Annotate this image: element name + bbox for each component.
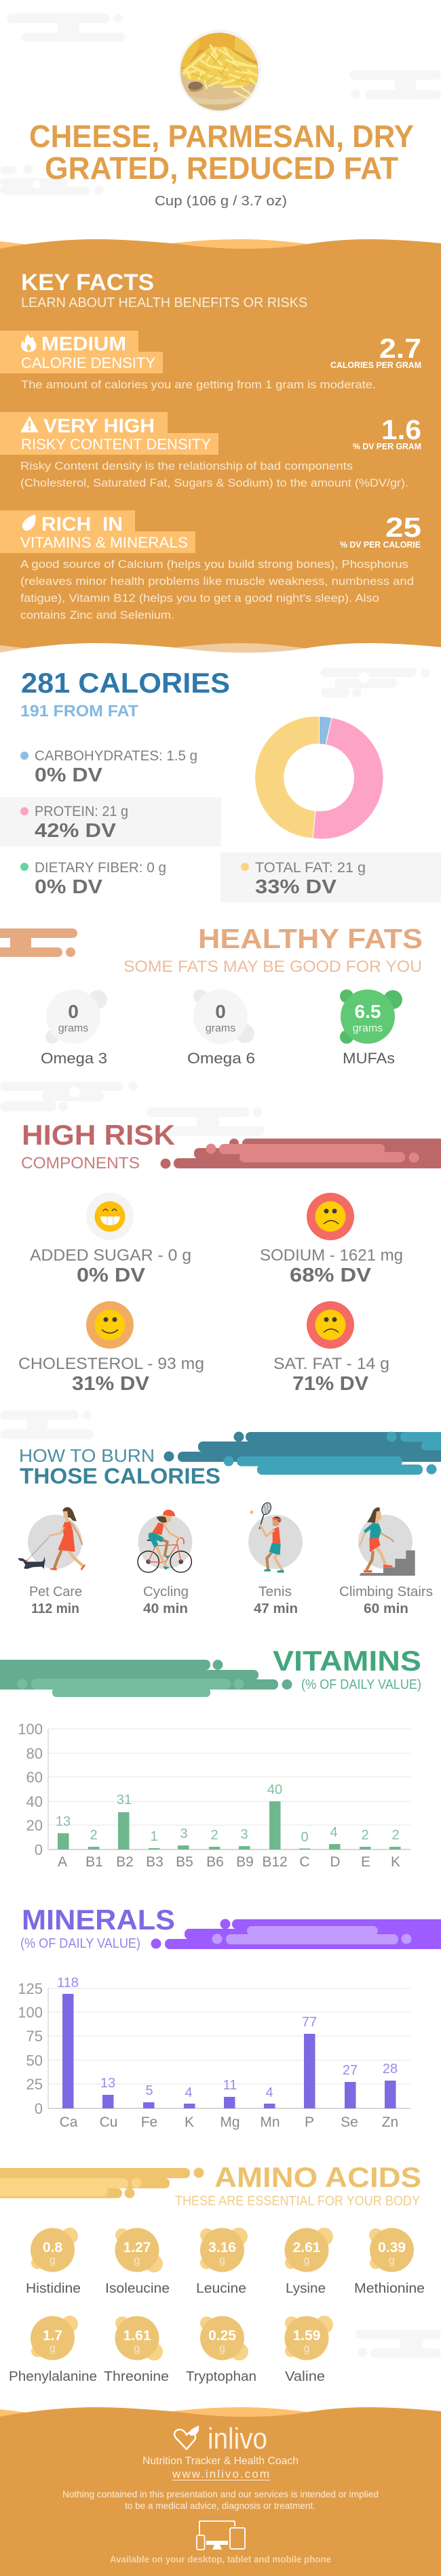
- heading: high risk: COMPONENTS: [21, 1154, 140, 1172]
- risk: cholesterol: 31% DV: [72, 1373, 150, 1395]
- chart: minerals bar chart: 75: [26, 2028, 43, 2045]
- chart: vitamins bar chart: A: [58, 1854, 67, 1870]
- icon: flame: [21, 334, 36, 352]
- disclaimer: Nothing contained in this presentation and our services is intended or implied: [62, 2489, 379, 2499]
- heading: key facts: [21, 270, 307, 310]
- amino acid: threonine: [104, 2316, 169, 2384]
- activity: climbing stairs: [339, 1507, 433, 1616]
- heading: amino acids: AMINO ACIDS: [214, 2161, 421, 2193]
- chart: minerals bar chart: 77: [302, 2015, 317, 2030]
- chart: minerals bar chart: 4: [265, 2085, 273, 2100]
- chart: calorie donut: [255, 716, 383, 839]
- chart: vitamins bar chart: [18, 1721, 410, 1870]
- decoration: healthy fats blob: [0, 928, 77, 957]
- disclaimer: [62, 2489, 379, 2511]
- heading: how to burn those calories: HOW TO BURN: [19, 1446, 155, 1466]
- chart: vitamins bar chart: 40: [267, 1782, 282, 1797]
- chart: minerals bar chart: 4: [185, 2085, 193, 2100]
- title: CHEESE, PARMESAN, DRY: [29, 119, 414, 154]
- risk: saturated fat: [273, 1301, 389, 1395]
- stat: MUFAs: [340, 989, 402, 1067]
- chart: minerals bar chart: 125: [18, 1980, 43, 1997]
- amino acid: methionine: g: [389, 2255, 395, 2266]
- activity: pet care: Pet Care: [29, 1585, 82, 1599]
- chart: minerals bar chart: Cu: [100, 2114, 117, 2130]
- legend: total fat: TOTAL FAT: 21 g: [255, 860, 366, 876]
- fact: risky content density: RISKY CONTENT DENSITY: [21, 436, 211, 453]
- fact: vitamins and minerals: % DV PER CALORIE: [340, 539, 421, 550]
- tagline: Nutrition Tracker & Health Coach: [142, 2455, 299, 2467]
- footer: [0, 2407, 441, 2576]
- fact: calorie density: The amount of calories you are getting from 1 gram is moderate.: [21, 378, 376, 391]
- heading: amino acids: [175, 2161, 421, 2209]
- chart: minerals bar chart: [18, 1976, 410, 2130]
- panel: key facts: [0, 239, 441, 664]
- chart: vitamins bar chart: 3: [180, 1826, 188, 1841]
- chart: minerals bar chart: Fe: [141, 2114, 157, 2130]
- fact: vitamins and minerals: fatigue), Vitamin B12 (helps you to get a good night's sleep). Also: [20, 592, 379, 605]
- serving size: Cup (106 g / 3.7 oz): [155, 194, 287, 209]
- heading: calories: 281 CALORIES: [21, 667, 230, 699]
- chart: minerals bar chart: Mn: [260, 2114, 280, 2130]
- amino acid: histidine: [26, 2228, 81, 2296]
- amino acid: threonine: g: [134, 2343, 140, 2354]
- heading: calories: [20, 667, 230, 720]
- stat: omega 6: grams: [206, 1023, 235, 1034]
- stat: omega 3: [41, 989, 107, 1067]
- activity: tennis: 47 min: [254, 1601, 298, 1616]
- amino acid: phenylalanine: [9, 2316, 97, 2384]
- activity: tennis: Tenis: [258, 1585, 292, 1599]
- chart: vitamins bar chart: 1: [150, 1829, 158, 1844]
- chart: vitamins bar chart: 0: [301, 1830, 309, 1845]
- legend: total fat: [220, 853, 441, 903]
- chart: vitamins bar chart: 2: [210, 1828, 218, 1843]
- heading: vitamins: VITAMINS: [273, 1645, 421, 1677]
- risk: added sugar: [30, 1193, 191, 1286]
- chart: vitamins bar chart: B1: [85, 1854, 103, 1870]
- heading: calories: 191 FROM FAT: [20, 702, 138, 720]
- activity: cycling: [138, 1510, 193, 1616]
- activity: cycling: Cycling: [143, 1585, 189, 1599]
- icon: grinning face: [95, 1201, 125, 1232]
- chart: minerals bar chart: K: [185, 2114, 194, 2130]
- amino acid: methionine: [354, 2228, 425, 2296]
- fact: vitamins and minerals: VITAMINS & MINERALS: [20, 534, 188, 551]
- food photo: grated cheese: [178, 30, 261, 114]
- activity: pet care: 112 min: [31, 1601, 79, 1616]
- risk: sodium: [260, 1193, 403, 1286]
- chart: vitamins bar chart: B9: [236, 1854, 254, 1870]
- amino acid: leucine: 3.16: [208, 2240, 236, 2255]
- icon: sad face: [315, 1201, 346, 1232]
- amino acid: histidine: 0.8: [43, 2240, 62, 2255]
- fact: vitamins and minerals: 25: [385, 512, 421, 543]
- chart: minerals bar chart: 118: [57, 1976, 79, 1990]
- chart: vitamins bar chart: 2: [391, 1828, 400, 1843]
- amino acid: methionine: 0.39: [378, 2240, 406, 2255]
- chart: minerals bar chart: Mg: [220, 2114, 240, 2130]
- legend: dietary fiber: [20, 860, 166, 898]
- risk: added sugar: ADDED SUGAR - 0 g: [30, 1246, 191, 1265]
- chart: vitamins bar chart: 80: [26, 1745, 43, 1762]
- stat: omega 3: 0: [68, 1001, 79, 1022]
- chart: vitamins bar chart: 0: [35, 1841, 43, 1858]
- chart: minerals bar chart: P: [305, 2114, 314, 2130]
- chart: minerals bar chart: 11: [223, 2078, 237, 2093]
- amino acid: isoleucine: g: [134, 2255, 140, 2266]
- heading: minerals: (% OF DAILY VALUE): [20, 1936, 140, 1951]
- chart: vitamins bar chart: B5: [176, 1854, 193, 1870]
- chart: vitamins bar chart: D: [330, 1854, 341, 1870]
- icon: devices: [197, 2521, 245, 2550]
- illustration: woman climbing stairs: [360, 1507, 415, 1576]
- illustration: woman walking dog: [18, 1507, 85, 1570]
- amino acid: isoleucine: [105, 2228, 170, 2296]
- title: [29, 119, 414, 186]
- stat: omega 6: Omega 6: [187, 1050, 255, 1067]
- decoration: burn calories blob: [164, 1431, 441, 1475]
- chart: vitamins bar chart: 2: [90, 1828, 98, 1843]
- amino acid: isoleucine: Isoleucine: [105, 2281, 170, 2296]
- risk: sodium: 68% DV: [290, 1265, 372, 1286]
- heading: minerals: MINERALS: [22, 1904, 175, 1936]
- chart: vitamins bar chart: 40: [26, 1793, 43, 1810]
- fact: vitamins and minerals: contains Zinc and Selenium.: [20, 609, 174, 621]
- fact: calorie density: [0, 331, 421, 391]
- amino acid: tryptophan: 0.25: [208, 2328, 236, 2344]
- amino acid: valine: [285, 2316, 333, 2384]
- chart: vitamins bar chart: 13: [56, 1814, 71, 1829]
- fact: vitamins and minerals: A good source of Calcium (helps you build strong bones), Phosphorus: [20, 558, 408, 571]
- heading: high risk: [21, 1119, 175, 1172]
- amino acid: methionine: Methionine: [354, 2281, 425, 2296]
- risk: cholesterol: CHOLESTEROL - 93 mg: [18, 1355, 204, 1373]
- amino acid: tryptophan: [186, 2316, 256, 2384]
- amino acid: leucine: Leucine: [196, 2281, 246, 2296]
- chart: minerals bar chart: Zn: [382, 2114, 398, 2130]
- chart: minerals bar chart: 25: [26, 2076, 43, 2093]
- stat: omega 6: 0: [215, 1001, 226, 1022]
- heading: healthy fats: SOME FATS MAY BE GOOD FOR YOU: [123, 958, 422, 976]
- disclaimer: to be a medical advice, diagnosis or treatment.: [125, 2501, 315, 2511]
- legend: dietary fiber: 0% DV: [35, 876, 103, 898]
- chart: vitamins bar chart: 4: [330, 1825, 338, 1840]
- legend: carbohydrates: 0% DV: [35, 764, 103, 786]
- amino acid: histidine: Histidine: [26, 2281, 81, 2296]
- amino acid: phenylalanine: 1.7: [43, 2328, 62, 2344]
- activity: climbing stairs: 60 min: [364, 1601, 408, 1616]
- icon: leaf: [22, 514, 35, 531]
- amino acid: lysine: Lysine: [286, 2281, 326, 2296]
- amino acid: lysine: [285, 2228, 333, 2296]
- chart: vitamins bar chart: E: [361, 1854, 370, 1870]
- legend: carbohydrates: CARBOHYDRATES: 1.5 g: [35, 748, 197, 764]
- fact: calorie density: CALORIE DENSITY: [21, 354, 155, 371]
- heading: how to burn those calories: [19, 1446, 220, 1488]
- fact: risky content density: 1.6: [381, 414, 421, 445]
- chart: minerals bar chart: 28: [383, 2062, 398, 2077]
- illustration: cyclist: [138, 1510, 191, 1572]
- chart: vitamins bar chart: B2: [116, 1854, 134, 1870]
- fact: risky content density: % DV PER GRAM: [353, 441, 421, 451]
- activity: tennis: [248, 1501, 303, 1616]
- legend: protein: [0, 797, 221, 846]
- amino acid: threonine: Threonine: [104, 2369, 169, 2384]
- risk: saturated fat: 71% DV: [292, 1373, 369, 1395]
- amino acid: histidine: g: [50, 2255, 56, 2266]
- heading: key facts: LEARN ABOUT HEALTH BENEFITS OR RISKS: [21, 295, 307, 310]
- risk: added sugar: 0% DV: [77, 1265, 146, 1286]
- decoration: amino acids blob: [0, 2167, 204, 2199]
- chart: vitamins bar chart: 60: [26, 1769, 43, 1786]
- fact: risky content density: (Cholesterol, Saturated Fat, Sugars & Sodium) to the amount (%DV/gr).: [20, 476, 408, 489]
- title: GRATED, REDUCED FAT: [45, 150, 398, 186]
- stat: MUFAs: 6.5: [355, 1001, 381, 1022]
- amino acid: valine: 1.59: [293, 2328, 320, 2344]
- chart: minerals bar chart: 50: [26, 2052, 43, 2069]
- activity: climbing stairs: Climbing Stairs: [339, 1585, 433, 1599]
- amino acid: phenylalanine: Phenylalanine: [9, 2369, 97, 2384]
- fact: calorie density: 2.7: [379, 333, 421, 364]
- chart: minerals bar chart: 100: [18, 2004, 43, 2021]
- chart: vitamins bar chart: 2: [361, 1828, 369, 1843]
- fact: risky content density: [0, 412, 421, 489]
- logo: inlivo heart: [174, 2422, 267, 2455]
- chart: vitamins bar chart: 100: [18, 1721, 43, 1738]
- legend: dietary fiber: DIETARY FIBER: 0 g: [35, 860, 166, 876]
- chart: minerals bar chart: Se: [341, 2114, 358, 2130]
- chart: vitamins bar chart: C: [299, 1854, 310, 1870]
- chart: minerals bar chart: 5: [145, 2083, 153, 2098]
- amino acid: isoleucine: 1.27: [123, 2240, 151, 2255]
- amino acid: leucine: g: [219, 2255, 225, 2266]
- fact: calorie density: MEDIUM: [41, 333, 126, 355]
- fact: calorie density: CALORIES PER GRAM: [330, 360, 421, 370]
- stat: omega 3: Omega 3: [41, 1050, 107, 1067]
- fact: risky content density: Risky Content density is the relationship of bad components: [20, 459, 353, 472]
- chart: vitamins bar chart: B3: [146, 1854, 164, 1870]
- risk: saturated fat: SAT. FAT - 14 g: [273, 1355, 389, 1373]
- heading: vitamins: [273, 1645, 421, 1692]
- chart: vitamins bar chart: K: [391, 1854, 400, 1870]
- chart: vitamins bar chart: 31: [117, 1793, 132, 1807]
- heading: high risk: HIGH RISK: [22, 1119, 175, 1151]
- legend: carbohydrates: [20, 748, 197, 786]
- amino acid: tryptophan: Tryptophan: [186, 2369, 256, 2384]
- fact: vitamins and minerals: [0, 510, 421, 621]
- decoration: minerals blob: [151, 1919, 441, 1949]
- legend: total fat: 33% DV: [255, 876, 337, 898]
- risk: sodium: SODIUM - 1621 mg: [260, 1246, 403, 1265]
- amino acid: tryptophan: g: [219, 2343, 225, 2354]
- chart: vitamins bar chart: B6: [206, 1854, 224, 1870]
- stat: omega 3: grams: [58, 1023, 88, 1034]
- legend: protein: PROTEIN: 21 g: [35, 804, 128, 819]
- amino acid: threonine: 1.61: [123, 2328, 151, 2344]
- amino acid: valine: Valine: [285, 2369, 325, 2384]
- chart: minerals bar chart: 27: [343, 2063, 358, 2078]
- stat: MUFAs: MUFAs: [343, 1050, 395, 1067]
- icon: smiling face: [95, 1309, 125, 1341]
- heading: minerals: [20, 1904, 175, 1951]
- heading: healthy fats: [123, 923, 423, 976]
- amino acid: lysine: 2.61: [293, 2240, 321, 2255]
- logo: inlivo heart: inlivo: [208, 2422, 267, 2455]
- fact: vitamins and minerals: RICH IN: [41, 514, 123, 535]
- amino acid: phenylalanine: g: [50, 2343, 56, 2354]
- decoration: vitamins blob: [0, 1660, 292, 1697]
- activity: cycling: 40 min: [143, 1601, 188, 1616]
- heading: key facts: KEY FACTS: [21, 270, 154, 295]
- heading: amino acids: THESE ARE ESSENTIAL FOR YOUR BODY: [175, 2194, 420, 2209]
- availability note: Available on your desktop, tablet and mobile phone: [110, 2554, 331, 2564]
- chart: vitamins bar chart: 3: [240, 1827, 248, 1842]
- heading: vitamins: (% OF DAILY VALUE): [301, 1677, 421, 1692]
- legend: protein: 42% DV: [35, 820, 117, 842]
- fact: vitamins and minerals: (releaves minor health problems like muscle weakness, numbness and: [20, 575, 414, 588]
- chart: minerals bar chart: Ca: [60, 2114, 78, 2130]
- chart: vitamins bar chart: 20: [26, 1817, 43, 1834]
- stat: MUFAs: grams: [353, 1023, 383, 1034]
- amino acid: leucine: [196, 2228, 248, 2296]
- heading: healthy fats: HEALTHY FATS: [198, 923, 423, 954]
- amino acid: lysine: g: [304, 2255, 309, 2266]
- risk: cholesterol: [18, 1301, 204, 1395]
- chart: minerals bar chart: 13: [100, 2076, 115, 2091]
- illustration: tennis player: [250, 1501, 284, 1573]
- website link: www.inlivo.com: [172, 2468, 269, 2480]
- fact: risky content density: VERY HIGH: [43, 415, 155, 437]
- heading: how to burn those calories: THOSE CALORIES: [20, 1464, 220, 1488]
- amino acid: valine: g: [304, 2343, 309, 2354]
- decoration: high risk blob: [160, 1139, 441, 1168]
- icon: sad face: [315, 1309, 346, 1341]
- chart: minerals bar chart: 0: [35, 2100, 43, 2117]
- activity: pet care: [18, 1507, 85, 1616]
- chart: vitamins bar chart: B12: [262, 1854, 288, 1870]
- stat: omega 6: [187, 989, 255, 1067]
- icon: warning triangle: [20, 416, 39, 432]
